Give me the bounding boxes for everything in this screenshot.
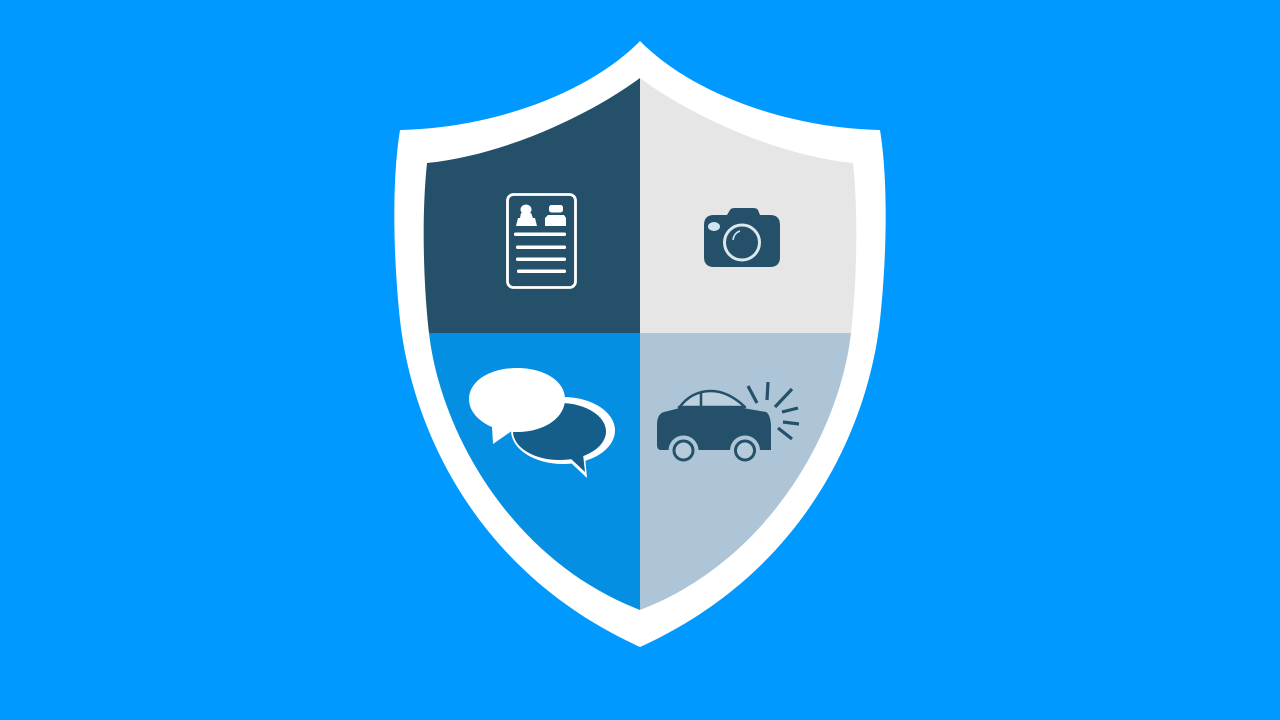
icon: speech bubbles bbox=[469, 368, 615, 478]
quadrant: bottom left blue bbox=[429, 333, 640, 610]
icon: document with two portraits bbox=[508, 194, 576, 288]
icon: camera bbox=[704, 208, 780, 267]
shield infographic canvas bbox=[394, 41, 886, 647]
quadrant: top right light grey bbox=[640, 78, 856, 333]
dark speech bubble bbox=[511, 397, 615, 478]
quadrant: bottom right pale blue bbox=[640, 333, 851, 610]
shield white border bbox=[394, 41, 886, 647]
white speech bubble bbox=[469, 368, 565, 444]
icon: car with impact lines bbox=[657, 382, 799, 466]
quadrant: top left dark bbox=[424, 78, 640, 333]
shield quadrants bbox=[424, 78, 856, 610]
